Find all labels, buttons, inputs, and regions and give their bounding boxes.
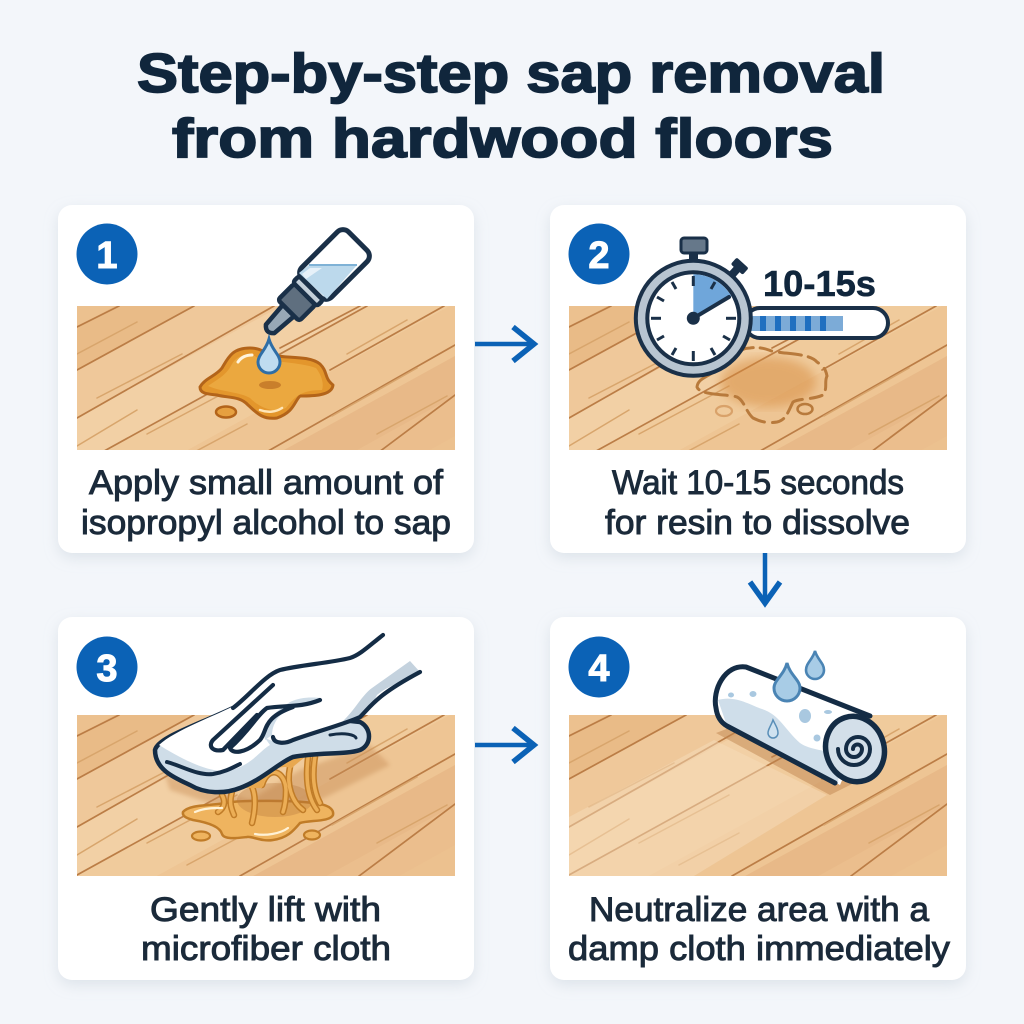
arrow: step 2 to 3/4 bbox=[750, 553, 780, 603]
badge 2: 2 bbox=[588, 235, 610, 277]
arrow: step 1 to 2 bbox=[475, 327, 534, 361]
microfiber cloth bbox=[155, 703, 369, 792]
caption 3 bbox=[141, 891, 391, 968]
title: from hardwood floors bbox=[172, 107, 833, 169]
title bbox=[137, 42, 885, 169]
caption 2: Wait 10-15 seconds bbox=[612, 464, 904, 502]
arrow: step 3 to 4 bbox=[475, 728, 534, 762]
progress bar bbox=[745, 308, 888, 338]
sap puddle bbox=[200, 348, 333, 418]
duration label: 10-15s bbox=[763, 263, 876, 304]
card 4 bbox=[550, 617, 966, 980]
icon: water drop small bbox=[806, 651, 824, 679]
cloth shadow bbox=[165, 745, 390, 810]
caption 4: damp cloth immediately bbox=[568, 930, 950, 968]
caption 4 bbox=[568, 891, 950, 968]
icon: damp rolled cloth bbox=[715, 667, 893, 789]
caption 1: Apply small amount of bbox=[89, 464, 444, 502]
wood floor 4 bbox=[569, 715, 947, 876]
panel: step 3 bbox=[58, 617, 474, 1024]
card 3 bbox=[58, 617, 474, 980]
badge 1: 1 bbox=[96, 235, 118, 277]
badge 2 bbox=[568, 224, 630, 284]
icon: alcohol dropper bottle bbox=[253, 226, 373, 346]
hand bbox=[211, 635, 420, 752]
card 1 bbox=[58, 205, 474, 553]
wood floor 3 bbox=[77, 715, 455, 876]
card 2 bbox=[550, 205, 966, 553]
caption 3: Gently lift with bbox=[150, 891, 381, 929]
panel: step 1 bbox=[56, 205, 476, 560]
panel: step 2 bbox=[548, 205, 968, 560]
badge 3: 3 bbox=[96, 648, 118, 690]
caption 2: for resin to dissolve bbox=[605, 504, 910, 542]
caption 1: isopropyl alcohol to sap bbox=[81, 504, 451, 542]
sap strands and puddle bbox=[183, 750, 333, 840]
badge 4: 4 bbox=[588, 648, 610, 690]
caption 3: microfiber cloth bbox=[141, 930, 391, 968]
icon: alcohol drop bbox=[258, 339, 280, 373]
wood floor 1 bbox=[77, 306, 455, 450]
icon: stopwatch bbox=[636, 238, 751, 376]
badge 1 bbox=[76, 224, 138, 284]
caption 1 bbox=[81, 464, 451, 542]
dissolving sap outline bbox=[697, 348, 827, 423]
badge 3 bbox=[76, 636, 138, 698]
wood floor 2 bbox=[569, 306, 947, 450]
badge 4 bbox=[568, 636, 630, 698]
icon: water drop large bbox=[774, 663, 800, 701]
caption 2 bbox=[605, 464, 910, 542]
title: Step-by-step sap removal bbox=[137, 42, 885, 104]
panel: step 4 bbox=[550, 617, 966, 1024]
caption 4: Neutralize area with a bbox=[589, 891, 929, 929]
